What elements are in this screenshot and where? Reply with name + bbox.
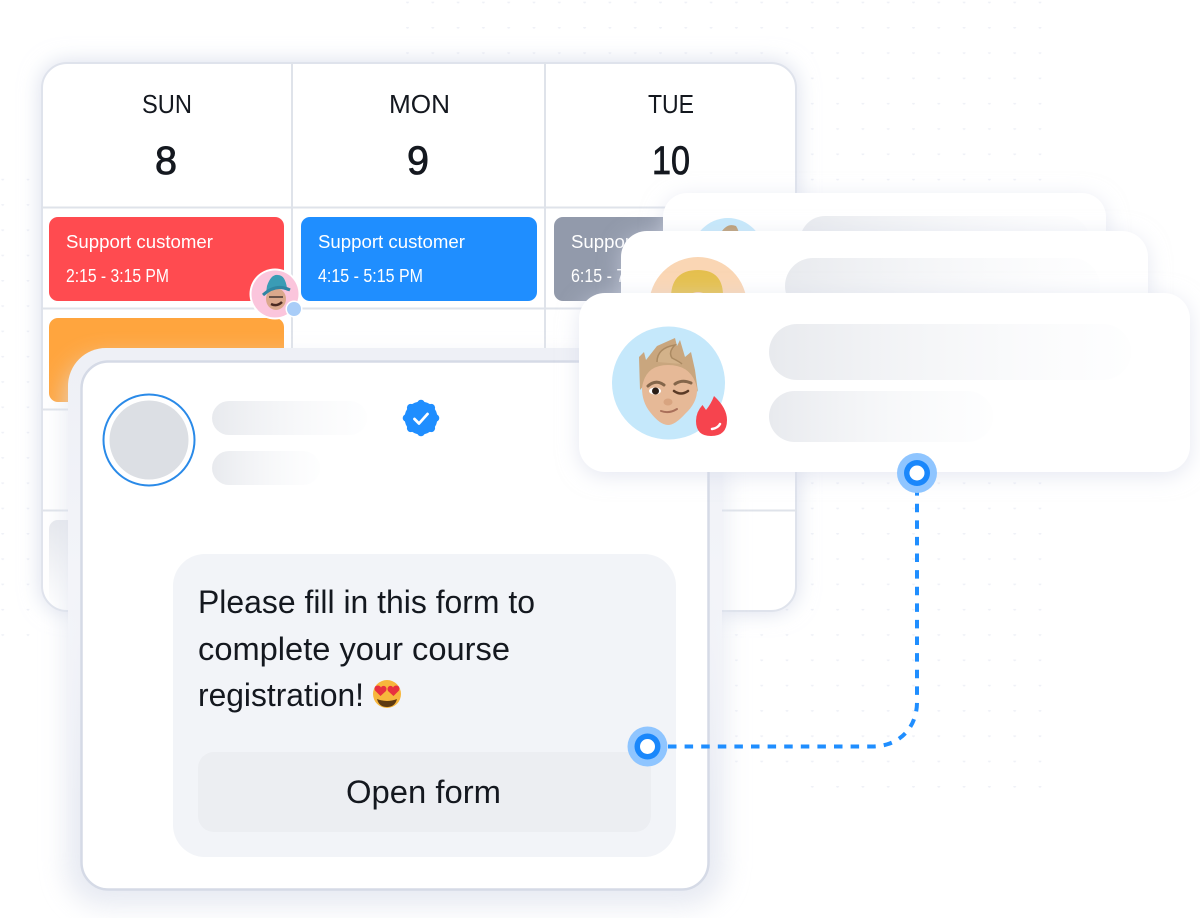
arrow: dashed connector: [668, 492, 917, 746]
background dot grid: [0, 0, 1045, 800]
event: blue support customer: Support customer: [318, 232, 465, 252]
icon: avatar with blue hat: [250, 268, 302, 320]
event: orange block: [49, 318, 284, 402]
heading: Monday 9: MON: [389, 89, 450, 119]
placeholder bar: [785, 258, 1100, 314]
icon: red flame: [696, 396, 727, 436]
panel: weekly calendar: [41, 62, 797, 612]
event: faded grey block: [49, 520, 284, 604]
event: grey support customer: 6:15 - 7:15 PM: [571, 266, 676, 286]
icon: back avatar: [692, 218, 764, 290]
button: open form: Open form: [346, 774, 501, 810]
placeholder: name: [769, 324, 1131, 380]
icon: verified badge: [403, 400, 439, 436]
event: blue support customer: [301, 217, 537, 301]
heading: Monday 9: [389, 89, 450, 183]
icon: sender avatar: [104, 394, 194, 486]
panel: back profile card: [663, 193, 1106, 303]
icon: connector node on profile card: [897, 453, 937, 493]
panel: front profile card: [579, 293, 1190, 472]
event: grey support customer: [554, 217, 790, 301]
heading: Tuesday 10: TUE: [648, 89, 694, 119]
event: red support customer: 2:15 - 3:15 PM: [66, 266, 169, 286]
heading: Sunday 8: 8: [155, 139, 177, 183]
heading: Tuesday 10: 10: [652, 139, 690, 183]
message text: registration!: [198, 677, 364, 713]
icon: blonde avatar: [649, 257, 747, 355]
heading: Sunday 8: SUN: [142, 89, 192, 119]
placeholder bar: [800, 216, 1090, 266]
heading: Tuesday 10: [648, 89, 694, 183]
message bubble: [173, 554, 676, 857]
panel: chat card: [66, 348, 724, 906]
panel: middle profile card: [621, 231, 1148, 355]
event: red support customer: [49, 217, 284, 301]
placeholder: sender subtitle: [212, 451, 320, 485]
icon: winking memoji avatar: [612, 326, 727, 440]
message text: complete your course: [198, 631, 510, 667]
heading: Sunday 8: [142, 89, 192, 183]
button: open form: [198, 752, 651, 832]
heading: Monday 9: 9: [407, 139, 429, 183]
event: red support customer: Support customer: [66, 232, 213, 252]
message text: [198, 584, 535, 713]
icon: connector node on message: [628, 726, 668, 766]
icon: heart eyes emoji: [373, 680, 401, 708]
message text: Please fill in this form to: [198, 584, 535, 620]
event: grey support customer: Support customer: [571, 232, 718, 252]
placeholder: sender name: [212, 401, 367, 435]
event: blue support customer: 4:15 - 5:15 PM: [318, 266, 423, 286]
placeholder: subtitle: [769, 391, 993, 442]
